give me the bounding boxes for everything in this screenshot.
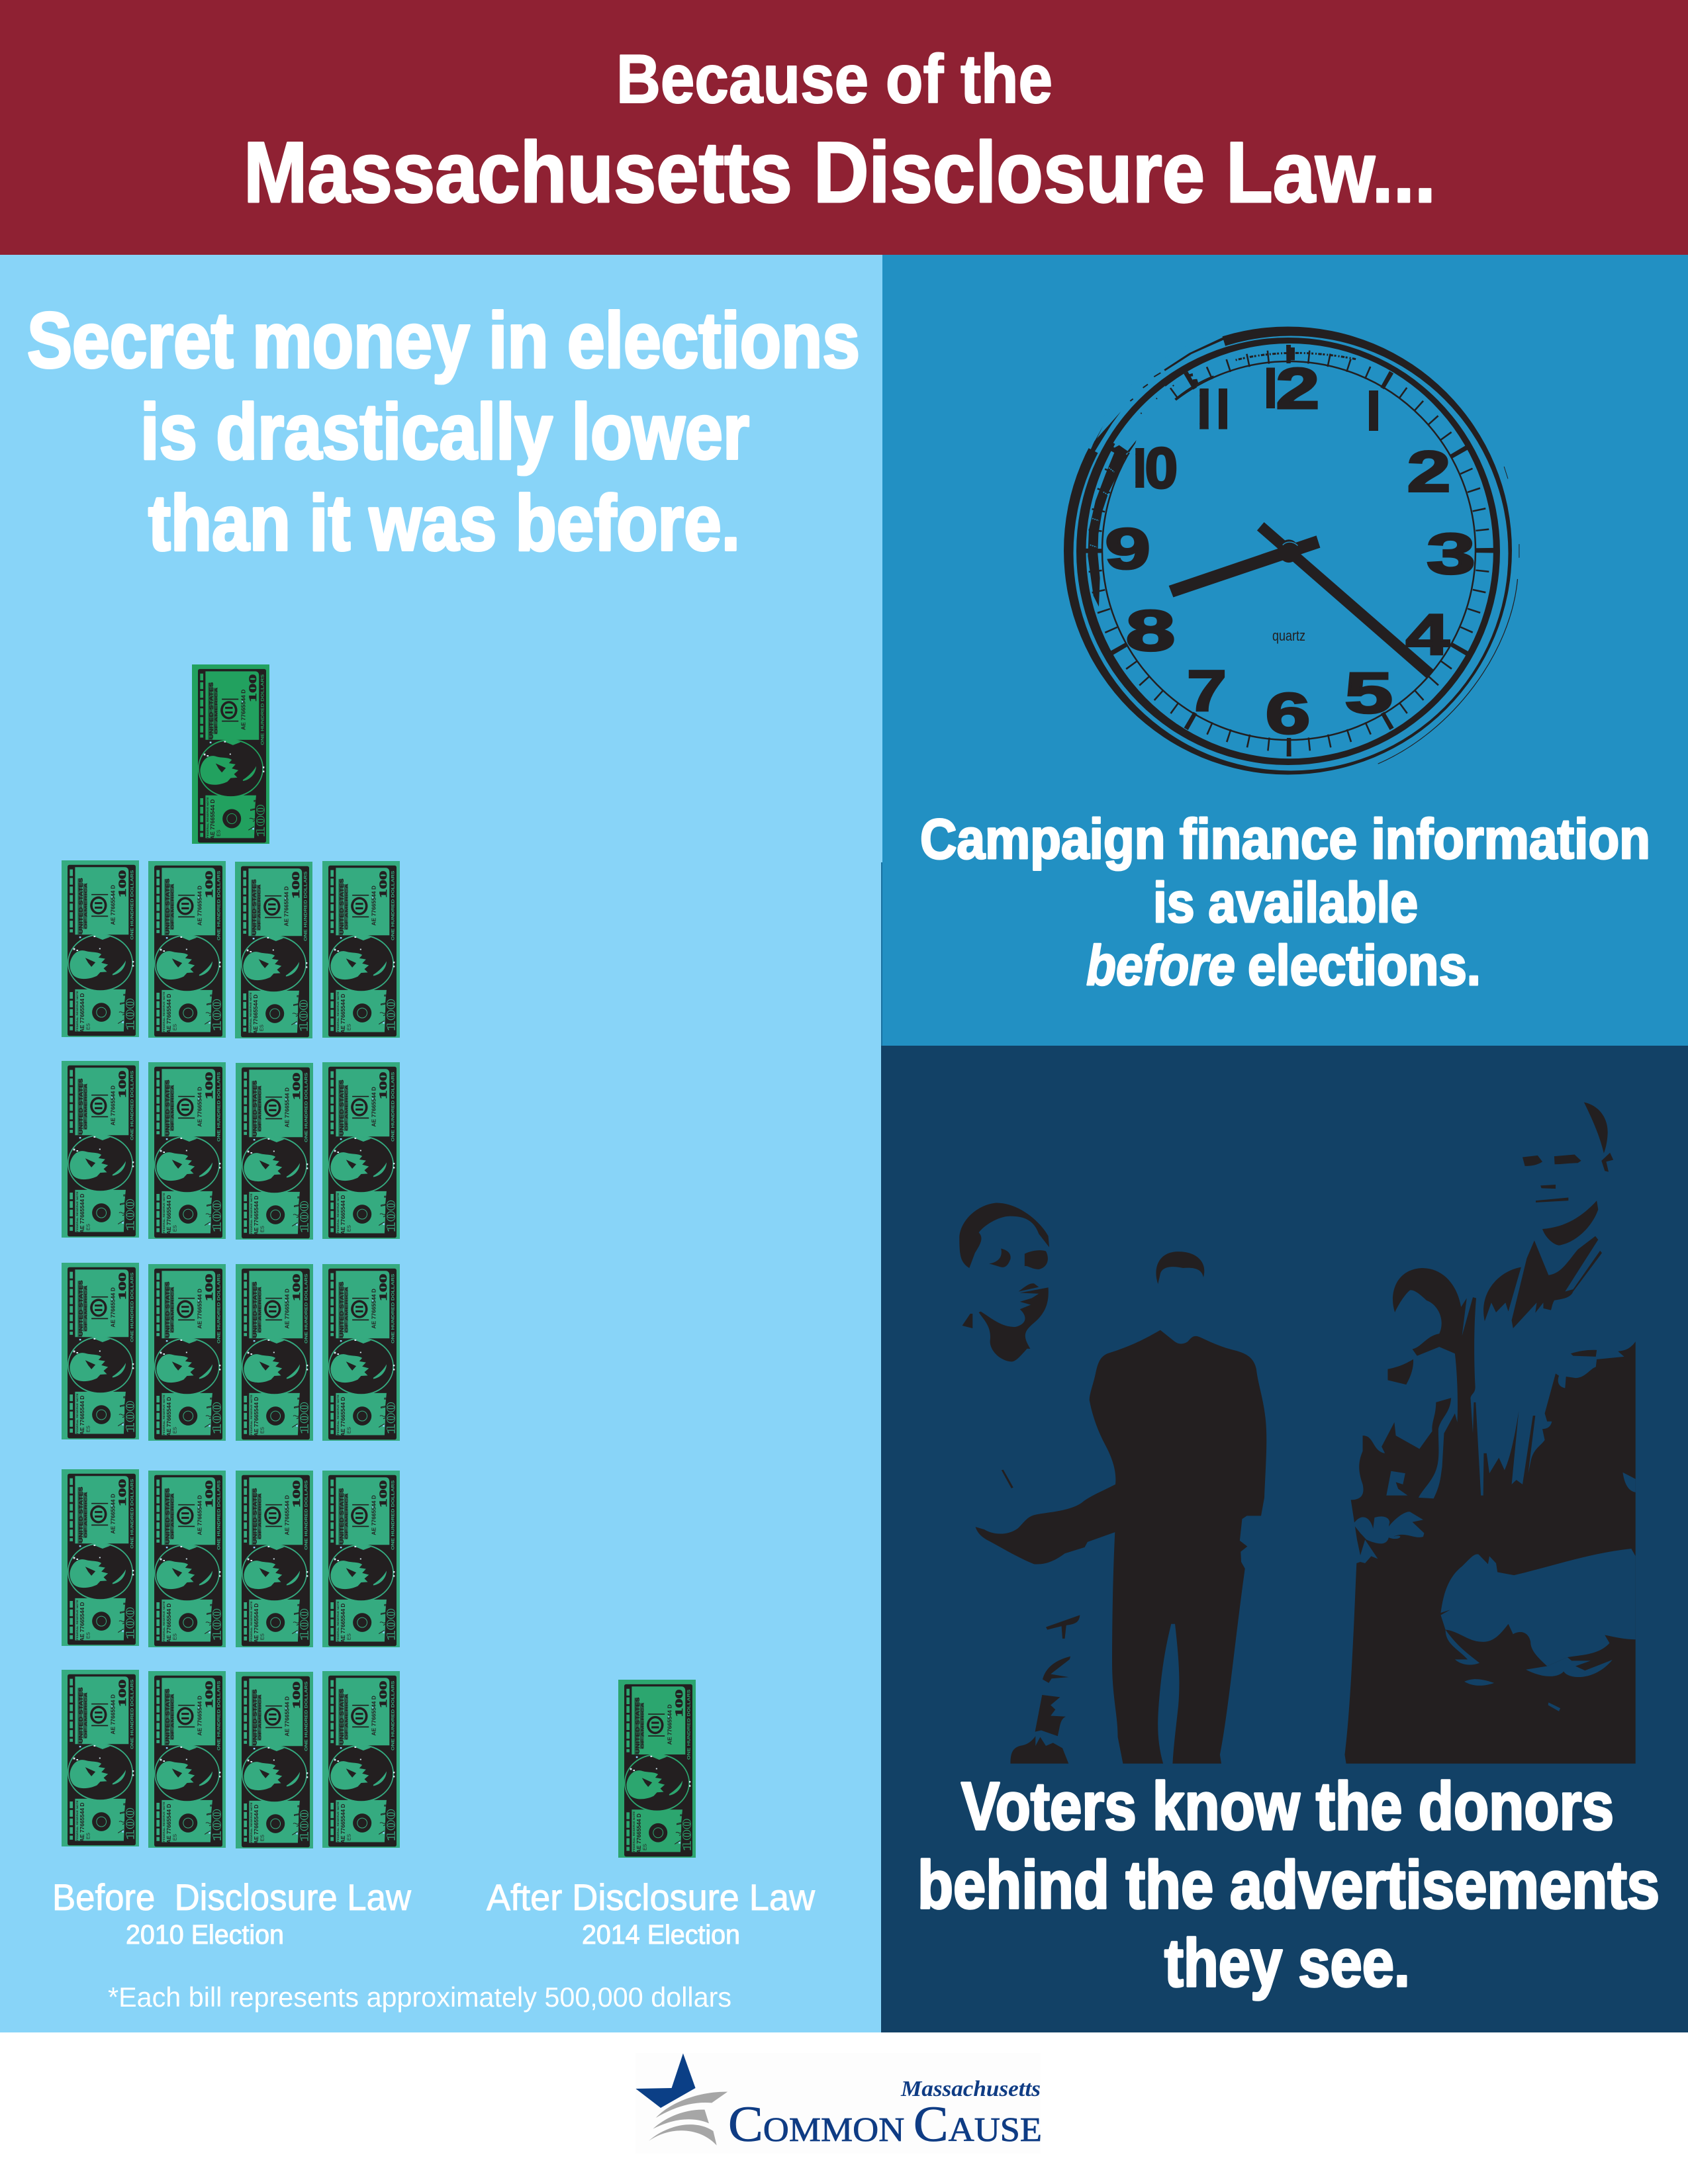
panel: secret money [0,255,882,2032]
illustration: silhouettes of donors [959,1102,1636,1764]
bill row 2 [62,1061,400,1240]
footnote: *Each bill represents approximately 500,000 dollars [108,1981,731,2013]
bill row 1 [62,860,400,1038]
clock wear marks [1084,336,1356,607]
clock numerals: 3 [1427,522,1476,586]
clock numerals: 5 [1344,661,1393,725]
header banner [0,0,1688,255]
heading: secret money [27,296,860,567]
heading: secret money: is drastically lower [140,388,749,476]
bill: top of stack [192,664,269,844]
logo: Massachusetts Common Cause [635,2053,1042,2154]
clock numerals [1105,357,1476,746]
text: campaign finance [920,808,1650,997]
figure: group at right [1344,1268,1636,1764]
clock outer ring [1064,326,1512,774]
panel: voters [881,1046,1688,2032]
bill row 5 [62,1670,400,1848]
caption: after disclosure law: After Disclosure Law [487,1876,816,1918]
logo text: Massachusetts: Massachusetts [900,2077,1041,2101]
clock numerals: 2 [1276,357,1319,421]
caption: before disclosure law: 2010 Election [126,1919,284,1950]
caption: after disclosure law [487,1876,816,1950]
clock numerals: 6 [1266,682,1311,746]
text: campaign finance: elections. [1248,934,1481,997]
title line: Massachusetts Disclosure Law: Massachusetts Disclosure Law... [244,124,1436,220]
caption: before disclosure law [52,1876,412,1950]
clock numerals: 1 [1248,357,1291,421]
logo text: Common Cause: COMMON CAUSE [728,2097,1042,2152]
bill row 3 [62,1263,400,1441]
title line: Because of the: Because of the [616,41,1053,118]
bill row 4 [62,1469,400,1647]
clock numerals: 0 [1145,436,1178,500]
clock inner ring [1076,338,1500,765]
clock numerals: 2 [1407,440,1451,504]
heading: secret money: than it was before. [148,479,740,567]
clock numerals: 7 [1187,659,1227,723]
caption: after disclosure law: 2014 Election [582,1919,740,1950]
text: campaign finance: before [1086,934,1235,997]
text: campaign finance: is available [1153,872,1418,934]
clock numerals: 8 [1125,599,1176,663]
text: voters know the donors [917,1768,1660,2001]
chart: bills before the law [62,664,400,1848]
figure: man at left [959,1203,1080,1764]
clock brand: quartz [1272,627,1305,644]
bill: after the law [618,1680,696,1858]
figure: man with cap of hair in suit [976,1251,1266,1764]
clock numerals: 9 [1105,517,1150,581]
icon: star [635,2054,727,2146]
clock numerals: 1 [1182,377,1225,442]
clock numerals: 1 [1201,377,1243,442]
heading: secret money: Secret money in elections [27,296,860,385]
panel: campaign finance [881,255,1688,1046]
figure: tall man at right [1483,1102,1613,1328]
icon: clock [1064,326,1519,774]
clock numerals: 1 [1352,379,1394,443]
clock numerals: 1 [1118,436,1160,500]
caption: before disclosure law: Before Disclosure Law [52,1876,412,1918]
text: voters know the donors: they see. [1164,1925,1410,2001]
clock hands [1169,522,1434,679]
minute track [1102,361,1476,740]
clock numerals: 4 [1406,603,1450,667]
